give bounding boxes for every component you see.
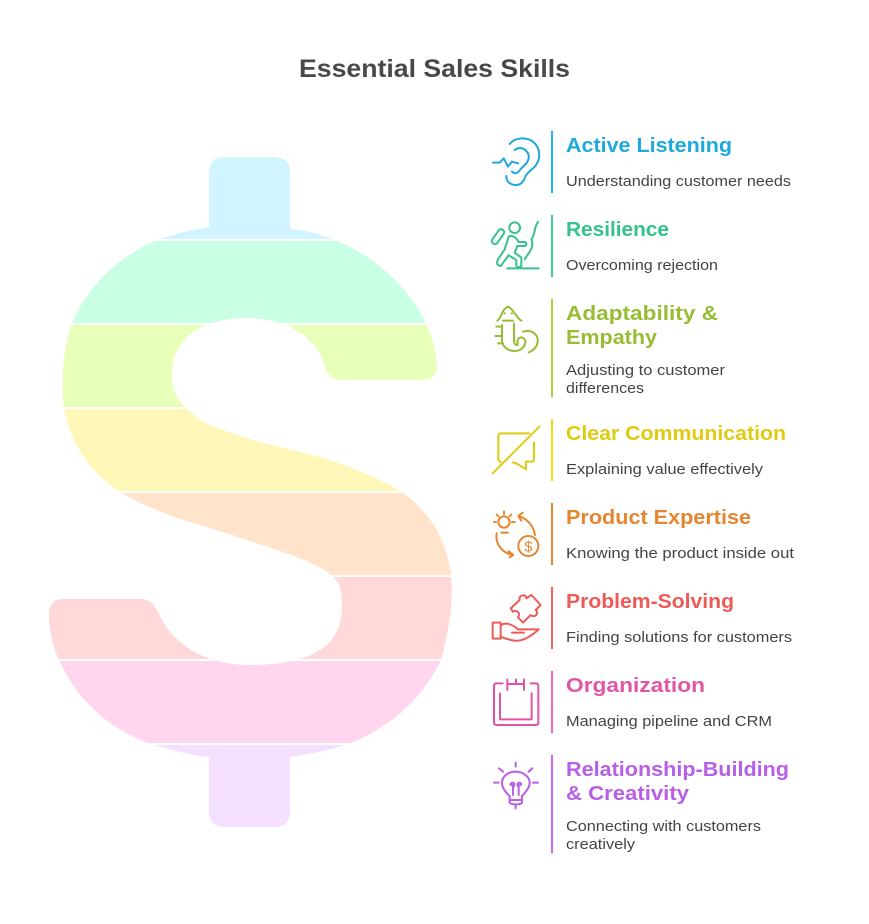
item: adaptability	[495, 299, 725, 397]
icon: calendar	[494, 679, 538, 725]
icon: light bulb	[494, 763, 538, 808]
band: adaptability	[62, 325, 437, 407]
divider bar	[551, 215, 553, 277]
band: problem solving	[40, 577, 460, 659]
description: Finding solutions for customers	[566, 630, 792, 646]
description line 2: differences	[566, 381, 644, 397]
description: Managing pipeline and CRM	[566, 714, 772, 730]
divider bar	[551, 587, 553, 649]
heading: Active Listening	[566, 135, 732, 157]
heading: Resilience	[566, 219, 669, 241]
item: active listening	[493, 131, 791, 193]
item: resilience	[491, 215, 718, 277]
heading line 2: Empathy	[566, 327, 658, 349]
heading: Problem-Solving	[566, 591, 734, 613]
icon: ear	[493, 138, 539, 185]
icon: hand with puzzle piece	[493, 595, 541, 641]
description: Connecting with customers	[566, 819, 761, 835]
band: organization	[40, 661, 460, 743]
divider bar	[551, 299, 553, 397]
description: Adjusting to customer	[566, 363, 725, 379]
description: Explaining value effectively	[566, 462, 764, 478]
description: Knowing the product inside out	[566, 546, 794, 562]
heading: Relationship-Building	[566, 759, 789, 781]
heading: Product Expertise	[566, 507, 751, 529]
band: resilience	[72, 241, 426, 323]
title: Essential Sales Skills	[299, 55, 570, 83]
divider bar	[551, 671, 553, 733]
description: Understanding customer needs	[566, 174, 791, 190]
icon: crossed speech bubble	[493, 427, 539, 473]
divider bar	[551, 503, 553, 565]
item: product expertise	[494, 503, 794, 565]
heading: Adaptability &	[566, 303, 718, 325]
icon: idea and money cycle	[494, 512, 538, 557]
icon: climber	[491, 222, 539, 268]
band: product expertise	[122, 493, 451, 575]
icon: idea and money cycle: $	[524, 539, 532, 555]
item: relationship building	[494, 755, 789, 853]
band: clear communication	[64, 409, 400, 491]
heading: Clear Communication	[566, 423, 786, 445]
description line 2: creatively	[566, 837, 636, 853]
band: active listening	[160, 157, 332, 239]
dollar sign graphic	[40, 150, 460, 835]
description: Overcoming rejection	[566, 258, 718, 274]
item: organization	[494, 671, 772, 733]
heading line 2: & Creativity	[566, 783, 690, 805]
divider bar	[551, 755, 553, 853]
icon: lizard	[495, 307, 538, 352]
item: problem solving	[493, 587, 792, 649]
divider bar	[551, 419, 553, 481]
divider bar	[551, 131, 553, 193]
band: relationship building	[154, 745, 344, 827]
heading: Organization	[566, 675, 705, 697]
item: clear communication	[493, 419, 786, 481]
